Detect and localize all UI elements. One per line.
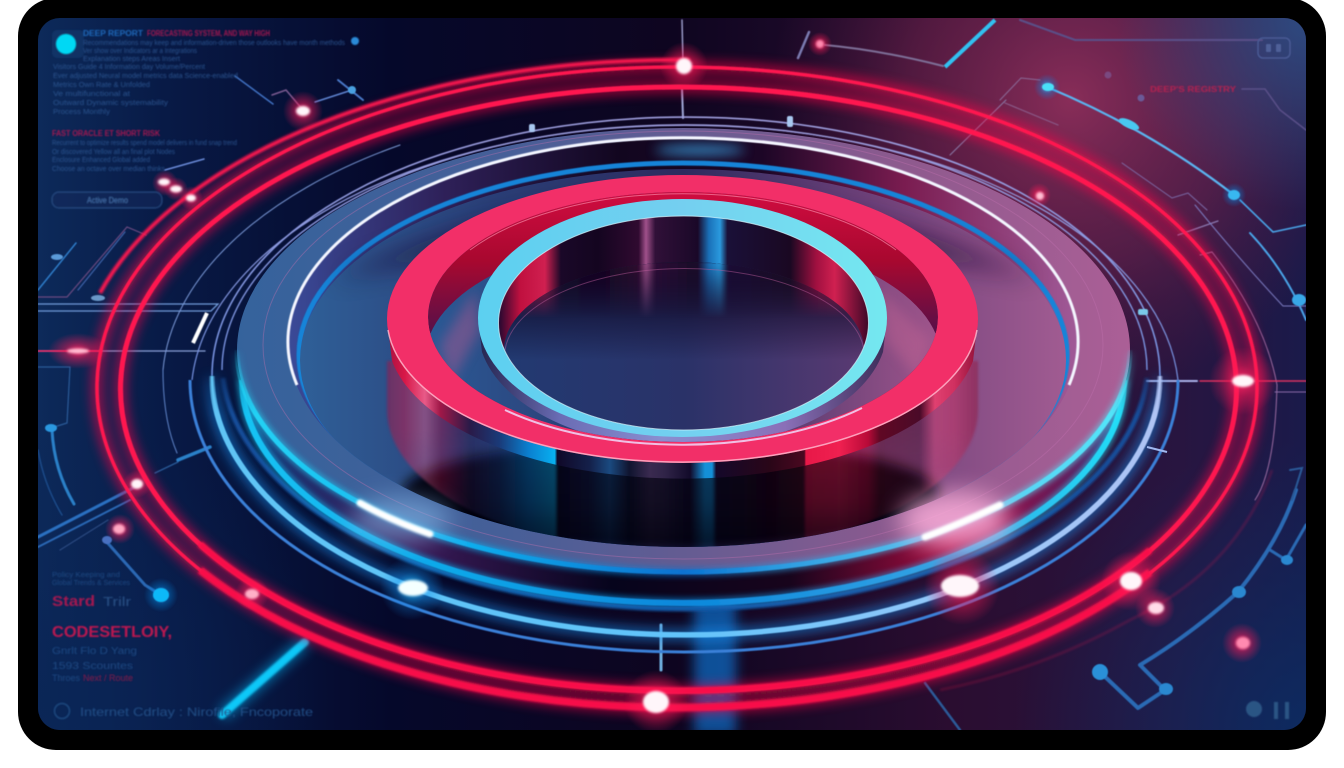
well interior (299, 145, 1067, 554)
hot spot: right (900, 492, 1010, 548)
faint blue ring G (223, 378, 1147, 609)
second cyan ring glow (242, 380, 1124, 603)
panel body text: Explanation steps Areas Insert (83, 56, 180, 63)
second body text: Or discovered Yellow all an final plot Nodes (52, 149, 175, 156)
cyan ring top (478, 199, 887, 437)
grey label: Trilr (103, 594, 132, 609)
panel body text: Visitors Guide 4 Information day Volume/Percent (53, 64, 205, 71)
hot spot: left (350, 498, 450, 542)
button: Active Demo (87, 196, 128, 205)
top-right pause badge (1258, 38, 1290, 58)
platform side (248, 405, 1117, 600)
body lines: 1593 Scountes (52, 661, 133, 672)
thin top rings (192, 117, 1178, 380)
thickened lower red band (200, 544, 1150, 708)
platform top surface (237, 128, 1130, 572)
floor shadow on top (330, 195, 1040, 280)
button (52, 192, 162, 208)
body lines: Next / Route (83, 673, 133, 683)
panel body text: Recommendations may keep and information-driven those outlooks have month methods (83, 40, 345, 47)
ring ticks (1147, 447, 1167, 452)
cyan bar: bottom left (222, 642, 305, 715)
body lines: Throes (52, 673, 80, 683)
red ring glow (97, 67, 1257, 708)
body lines: Gnrlt Flo D Yang (52, 646, 137, 657)
small intro text: Policy Keeping and (52, 572, 120, 579)
pink reflection left (440, 290, 480, 385)
circuit lines: top and right (661, 20, 1306, 730)
red ring highlights (388, 194, 977, 462)
panel body text (53, 40, 345, 116)
cyan ring edge highlight (498, 216, 868, 430)
red label: Stard (52, 593, 95, 610)
outer red ring (97, 67, 1257, 708)
blue glow at top of well (655, 145, 745, 155)
pink reflection right (880, 290, 930, 380)
cyan status dot (52, 30, 84, 58)
blue rings, lower half (190, 376, 1178, 652)
body lines (52, 646, 137, 683)
bright blue ring C, thin section (210, 376, 1162, 411)
ring glow (212, 376, 1160, 635)
inner red ring (120, 87, 1236, 691)
footer with icon (54, 704, 313, 719)
bottom-right media icon (1246, 701, 1289, 719)
red title: CODESETLOIY, (52, 624, 172, 641)
panel body text: Ve multifunctional at (53, 91, 130, 98)
node cores white (67, 40, 1254, 713)
footer with icon: Internet Cdrlay : Nirofile, Fncoporate (80, 705, 313, 719)
second body text: Choose an octave over median thinks (52, 166, 165, 173)
cyan cylinder side (478, 318, 887, 448)
cyan hole wall (498, 216, 868, 430)
red neon rings (97, 60, 1272, 708)
faint outer red trail (940, 470, 1272, 690)
inside hole (425, 234, 941, 484)
second heading red: FAST ORACLE ET SHORT RISK (52, 129, 160, 138)
cyan hole floor (498, 262, 868, 438)
node: white-blue (380, 556, 444, 620)
bright blue ring C, thick section (212, 376, 1160, 635)
panel body text: Outward Dynamic systemability (53, 100, 169, 107)
bottom-left text block (52, 572, 172, 683)
second cyan ring (242, 380, 1124, 603)
hole wall (428, 192, 938, 442)
cyan bar: upper right (945, 20, 995, 67)
second body text: Recurrent to optimize results spend model delivers in fund snap trend (52, 140, 237, 147)
thin blue ring D (190, 380, 1178, 652)
second body text (52, 140, 237, 173)
blue arc: upper right (1047, 87, 1234, 195)
small intro text (52, 572, 130, 587)
circuit lines: left side (38, 76, 400, 595)
top ring markers (529, 116, 1148, 315)
panel body text: Ever adjusted Neural model metrics data Science-enabled (53, 73, 238, 80)
outermost red arc (100, 60, 690, 293)
second body text: Enclosure Enhanced Global added (52, 157, 150, 164)
blue nodes (45, 72, 1306, 695)
red ring top surface (387, 175, 978, 463)
panel body text: Process Monthly (53, 109, 111, 116)
hole floor (425, 234, 941, 484)
small intro text: Global Trends & Services (52, 580, 130, 587)
panel body text: Ver show over Indicators ar a Integrations (83, 48, 197, 55)
vertical blue glow column (694, 575, 736, 735)
top-right label: DEEP'S REGISTRY (1150, 85, 1237, 94)
white well edge (288, 138, 1078, 385)
panel heading red: FORECASTING SYSTEM, AND WAY HIGH (147, 29, 270, 38)
platform rim (237, 350, 1130, 572)
dark reflection bed (400, 439, 940, 551)
central red ring (387, 175, 978, 484)
ring reflection (387, 361, 978, 554)
floor rim line (505, 269, 864, 350)
panel body text: Metrics Own Rate & Unfolded (53, 82, 150, 89)
red ring side wall (387, 319, 978, 479)
indicator dot (351, 37, 359, 45)
top-left text panel (52, 29, 359, 208)
floor streak reflections (498, 262, 868, 322)
well floor (300, 169, 1066, 551)
white status bar (193, 313, 207, 343)
platform (237, 128, 1130, 603)
panel heading: DEEP REPORT (83, 29, 143, 38)
thin line on band (263, 131, 1103, 559)
blue inner ring (299, 163, 1067, 547)
well wall (288, 139, 1078, 547)
platform rim glow (237, 350, 1130, 572)
